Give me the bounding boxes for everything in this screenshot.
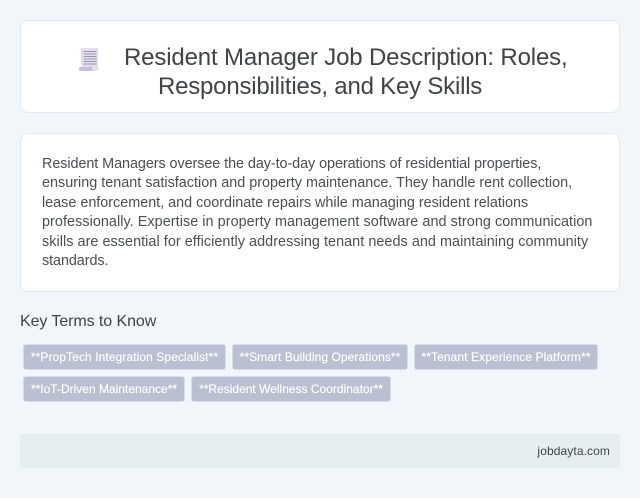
text block: description: standards. [42, 253, 108, 269]
tag: Tenant Experience Platform [414, 344, 598, 370]
heading: title: Resident Manager Job Description: Roles, [124, 44, 568, 71]
panel: description card [20, 133, 620, 292]
tag: Resident Wellness Coordinator [191, 376, 391, 402]
text block: description: professionally. Expertise in property management software and strong communication [42, 214, 592, 230]
tag: IoT-Driven Maintenance [23, 376, 185, 402]
text block: description: ensuring tenant satisfaction and property maintenance. They handle rent collection, [42, 175, 572, 191]
heading: title [124, 44, 568, 100]
tag: Tenant Experience Platform: **Tenant Experience Platform** [421, 350, 591, 364]
tag: Smart Building Operations: **Smart Building Operations** [240, 350, 400, 364]
heading: title: Responsibilities, and Key Skills [158, 73, 482, 100]
panel: title card [20, 20, 620, 113]
text block: description: Resident Managers oversee the day-to-day operations of residential properties, [42, 156, 541, 172]
text block: description: lease enforcement, and coordinate repairs while managing resident relations [42, 195, 528, 211]
footer bar [20, 434, 620, 468]
tag: PropTech Integration Specialist: **PropTech Integration Specialist** [31, 350, 218, 364]
footer text: source: jobdayta.com [537, 444, 610, 458]
text block: description: skills are essential for efficiently addressing tenant needs and maintaining community [42, 234, 588, 250]
tag: IoT-Driven Maintenance: **IoT-Driven Maintenance** [31, 382, 177, 396]
icon: document scroll [79, 48, 98, 71]
text block: description [42, 156, 592, 269]
heading: key terms: Key Terms to Know [20, 313, 156, 330]
tag: PropTech Integration Specialist [23, 344, 226, 370]
tag: Resident Wellness Coordinator: **Resident Wellness Coordinator** [199, 382, 383, 396]
tag: Smart Building Operations [232, 344, 408, 370]
